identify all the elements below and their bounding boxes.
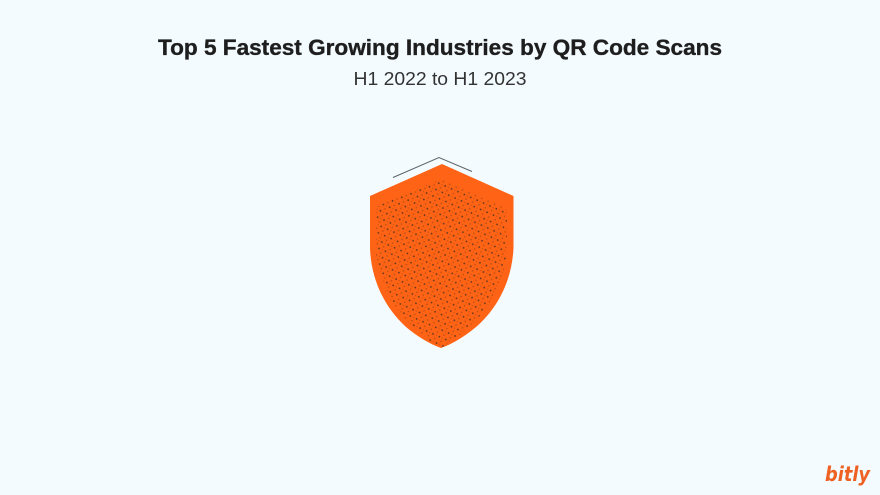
shield accent line: [393, 158, 472, 178]
shield halftone texture: [376, 180, 507, 347]
title: Top 5 Fastest Growing Industries by QR Code Scans: [158, 35, 722, 60]
shield body: [370, 164, 514, 348]
subtitle: H1 2022 to H1 2023: [354, 69, 526, 89]
icon: shield: [370, 158, 514, 350]
logo: bitly: bitly: [825, 462, 871, 486]
